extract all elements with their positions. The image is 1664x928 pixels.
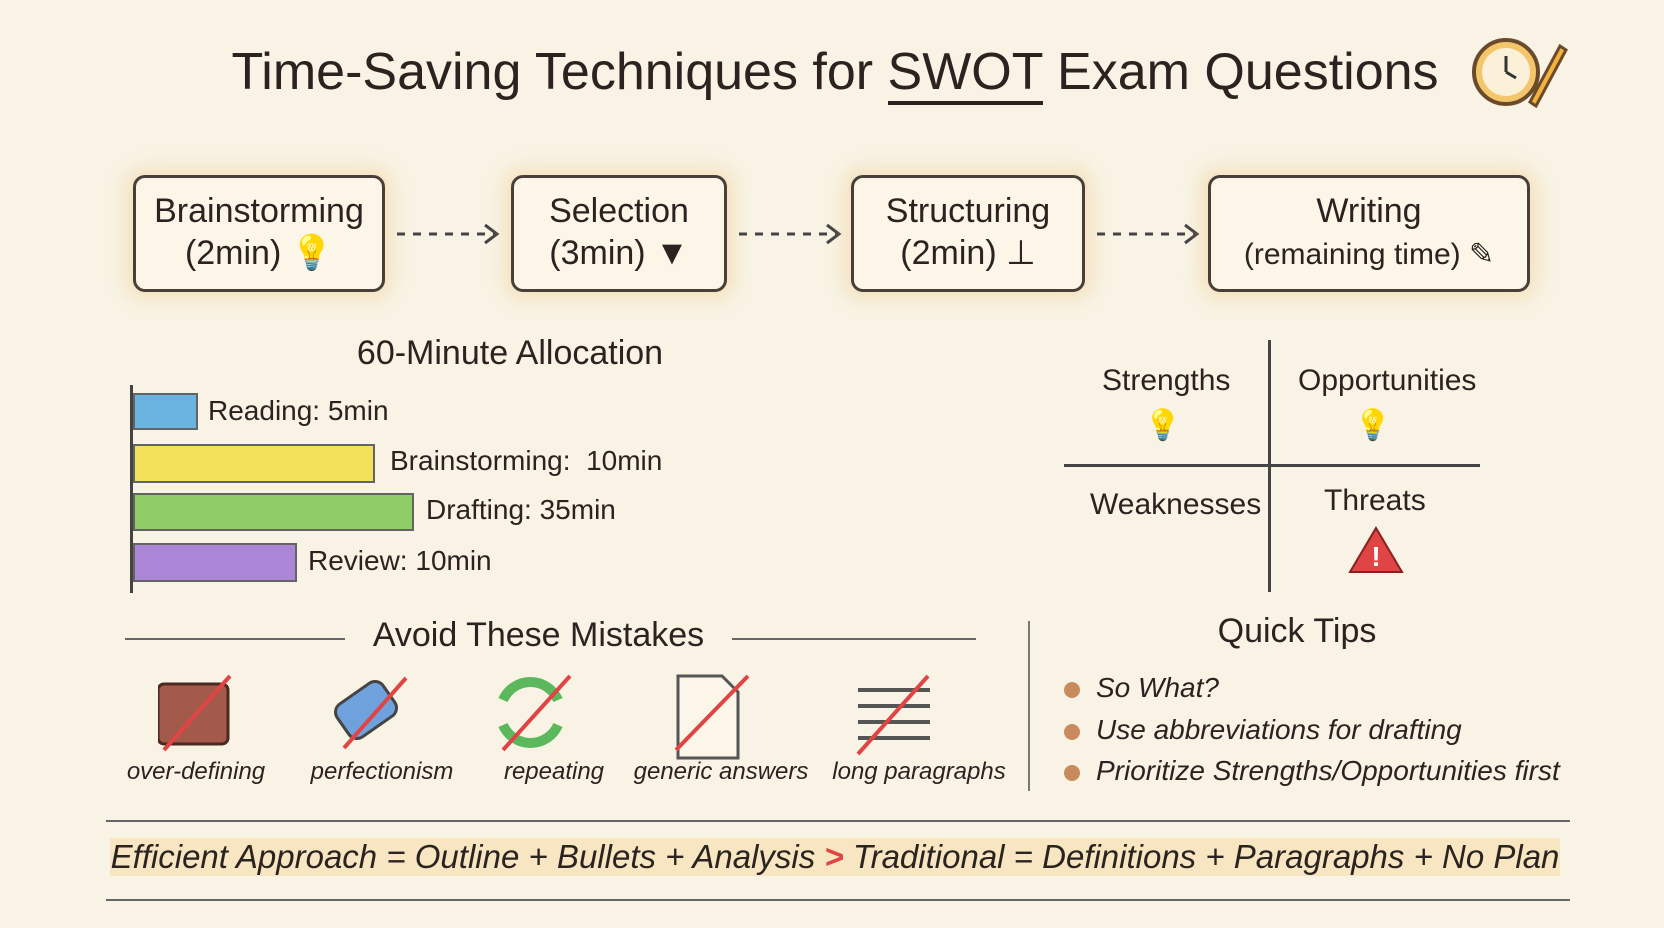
icon: clock and pencil (1472, 38, 1568, 108)
process step: selection: (3min) ▼ (549, 234, 689, 272)
process step: brainstorming (133, 175, 385, 292)
quick tips: So What? (1096, 672, 1219, 703)
chart heading: 60-Minute Allocation (357, 334, 663, 372)
SWOT quadrant: Strengths (1102, 364, 1230, 397)
SWOT quadrant: Weaknesses (1090, 488, 1261, 521)
SWOT quadrant: Threats (1324, 484, 1426, 517)
bar chart: Review: 10min (308, 545, 492, 576)
bar chart: Reading: 5min (208, 395, 389, 426)
process step: structuring (851, 175, 1085, 292)
SWOT quadrant: Opportunities (1298, 364, 1476, 397)
mistakes heading: Avoid These Mistakes (373, 616, 704, 654)
process step: writing: Writing (1316, 192, 1422, 230)
bar chart (130, 385, 662, 593)
process step: writing (1208, 175, 1530, 292)
process step: writing: (remaining time) ✎ (1244, 238, 1494, 271)
bar chart: Brainstorming: 10min (390, 445, 662, 476)
arrow 2 (739, 224, 842, 244)
title: Time-Saving Techniques for SWOT Exam Questions (231, 43, 1439, 101)
process step: selection (511, 175, 727, 292)
SWOT quadrant: 💡 (1144, 409, 1181, 442)
bottom comparison: Efficient Approach = Outline + Bullets + Analysis > Traditional = Definitions + Paragraphs + No Plan (111, 838, 1559, 875)
mistakes icons: long paragraphs (832, 758, 1006, 785)
mistakes icons: perfectionism (311, 758, 453, 785)
SWOT quadrant: 💡 (1354, 409, 1391, 442)
process step: brainstorming: Brainstorming (154, 192, 364, 230)
quick tips: Prioritize Strengths/Opportunities first (1096, 755, 1560, 786)
SWOT quadrant (1064, 340, 1480, 592)
mistakes icons: generic answers (634, 758, 808, 785)
quick tips (1064, 612, 1561, 786)
process step: selection: Selection (549, 192, 689, 230)
SWOT quadrant: ! (1371, 541, 1381, 572)
process step: structuring: (2min) ⊥ (900, 234, 1036, 272)
mistakes icons: repeating (504, 758, 604, 785)
arrow 1 (397, 224, 500, 244)
quick tips: Use abbreviations for drafting (1096, 714, 1462, 745)
mistakes icons (127, 674, 1006, 785)
quick tips: Quick Tips (1218, 612, 1376, 650)
process step: structuring: Structuring (886, 192, 1050, 230)
arrow 3 (1097, 224, 1200, 244)
process step: brainstorming: (2min) 💡 (185, 234, 333, 272)
mistakes icons: over-defining (127, 758, 265, 785)
bar chart: Drafting: 35min (426, 494, 616, 525)
